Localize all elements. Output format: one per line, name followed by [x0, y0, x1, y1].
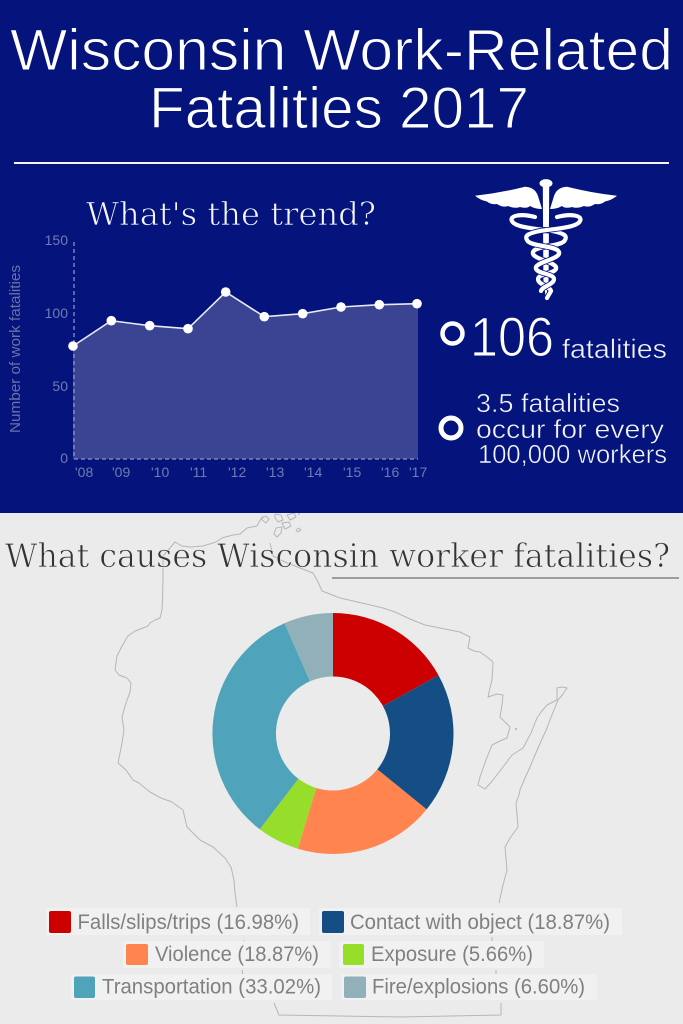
x axis labels: '14: [304, 464, 322, 480]
legend item: transportation: Transportation (33.02%): [102, 976, 321, 998]
x axis labels: '15: [343, 464, 361, 480]
trend line: [73, 292, 417, 346]
slice: fire/explosions: [284, 613, 333, 681]
area fill: [73, 292, 418, 459]
legend item: contact with object: Contact with object (18.87%): [350, 911, 610, 934]
icon: ring bullet: [442, 324, 462, 344]
stat: rate per 100,000 workers: 100,000 workers: [478, 439, 667, 469]
icon: ring bullet: [441, 418, 461, 438]
legend item: exposure: [339, 941, 544, 968]
legend item: falls: Falls/slips/trips (16.98%): [78, 911, 299, 934]
stat: 106 fatalities: 106: [470, 305, 554, 368]
y axis labels: [45, 232, 68, 466]
y axis labels: 100: [45, 305, 68, 321]
y axis title: Number of work fatalities: [7, 265, 24, 433]
stat: rate per 100,000 workers: occur for every: [476, 414, 664, 444]
map: Wisconsin outline: [115, 513, 567, 1017]
legend item: violence: Violence (18.87%): [155, 943, 319, 966]
data points: [68, 287, 422, 351]
y axis labels: 0: [60, 450, 68, 466]
x axis labels: '17: [409, 464, 427, 480]
x axis labels: '12: [228, 464, 246, 480]
x axis labels: '11: [190, 464, 207, 480]
title: Fatalities 2017: [149, 76, 529, 141]
x axis labels: '09: [112, 464, 130, 480]
slice: exposure: [260, 779, 316, 849]
slice: transportation: [212, 623, 310, 829]
line chart: fatalities trend: [7, 232, 427, 480]
stat: rate per 100,000 workers: [441, 388, 667, 469]
panel: blue header: [0, 0, 683, 513]
x axis labels: '16: [381, 464, 399, 480]
slice: violence: [298, 769, 427, 854]
heading: causes: What causes Wisconsin worker fatalities?: [5, 536, 670, 575]
x axis labels: [75, 464, 427, 480]
legend item: exposure: Exposure (5.66%): [371, 943, 533, 966]
icon: caduceus: [475, 179, 617, 300]
axis lines: [74, 242, 418, 459]
legend item: fire/explosions: Fire/explosions (6.60%): [372, 976, 585, 998]
y axis labels: 50: [52, 378, 68, 394]
title: [10, 18, 673, 141]
donut chart: causes: [212, 613, 453, 854]
stat: rate per 100,000 workers: 3.5 fatalities: [476, 388, 620, 418]
heading: trend: What's the trend?: [86, 195, 376, 233]
y axis labels: 150: [45, 232, 68, 248]
x axis labels: '10: [151, 464, 169, 480]
x axis labels: '08: [75, 464, 93, 480]
legend: [46, 908, 622, 1000]
title: Wisconsin Work-Related: [10, 18, 673, 83]
x axis labels: '13: [266, 464, 284, 480]
stat: 106 fatalities: fatalities: [562, 334, 667, 364]
slice: falls: [333, 613, 438, 706]
title divider: [14, 162, 669, 164]
slice: contact with object: [377, 675, 453, 809]
panel: light background: [0, 513, 683, 1024]
stat: 106 fatalities: [442, 305, 667, 368]
heading underline: [332, 577, 679, 579]
